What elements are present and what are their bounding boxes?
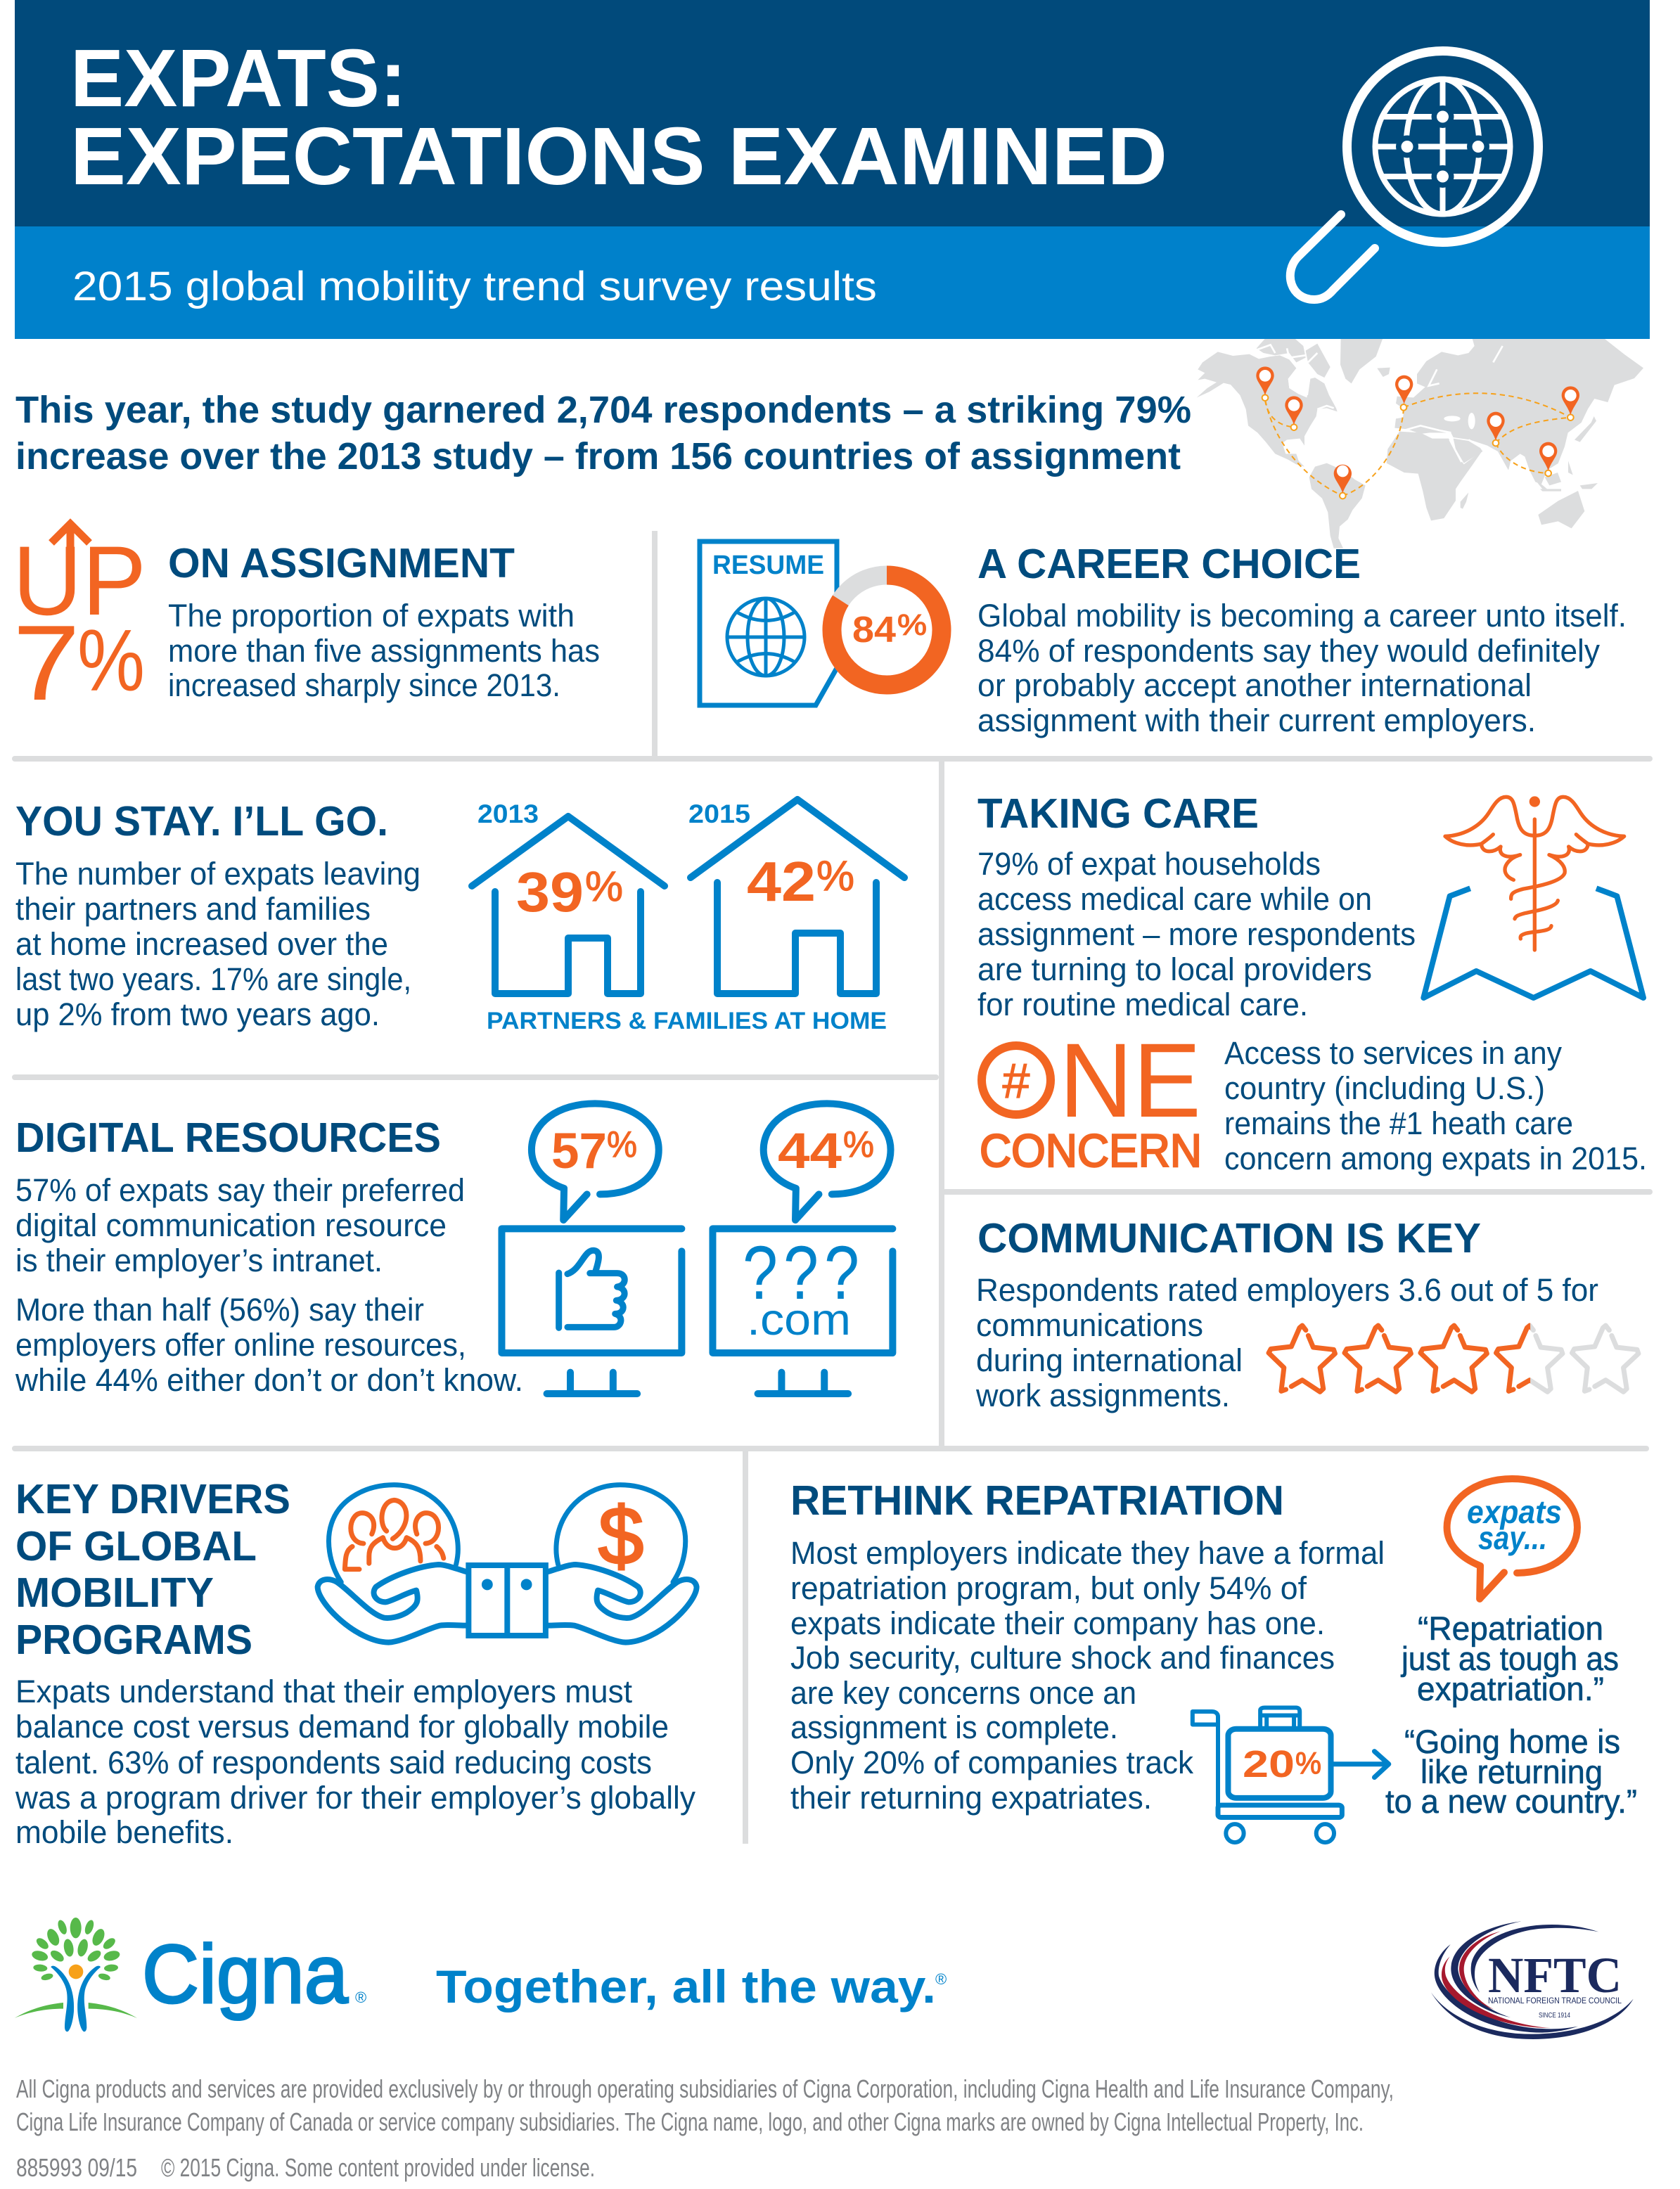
icon: monitor .com with 44% bubble bbox=[712, 1103, 892, 1394]
body text bbox=[168, 598, 600, 703]
icon: hands shaking holding people and money: $ bbox=[598, 1490, 643, 1581]
concern text: concern among expats in 2015. bbox=[1224, 1141, 1647, 1176]
icon: house 2013: % bbox=[585, 863, 623, 910]
body text: or probably accept another international bbox=[977, 667, 1532, 703]
quote 2: to a new country.” bbox=[1385, 1783, 1637, 1820]
icon: #ONE concern bbox=[980, 1021, 1202, 1176]
body text bbox=[975, 1272, 1598, 1413]
panel: communication is key bbox=[975, 1215, 1639, 1413]
tagline: ® bbox=[935, 1970, 947, 1988]
legal disclaimer: 885993 09/15 bbox=[16, 2153, 137, 2182]
world map with route pins bbox=[1197, 338, 1643, 548]
body text: communications bbox=[976, 1307, 1203, 1343]
body text: their returning expatriates. bbox=[790, 1780, 1152, 1816]
body text: was a program driver for their employer’s globally bbox=[15, 1780, 695, 1816]
icon: house 2013 bbox=[472, 800, 665, 994]
icon: luggage cart with 20%: % bbox=[1295, 1746, 1321, 1780]
icon: luggage cart with 20%: 20 bbox=[1243, 1743, 1295, 1785]
body text: while 44% either don’t or don’t know. bbox=[15, 1362, 523, 1398]
quote 1: expatriation.” bbox=[1417, 1670, 1604, 1707]
intro statement: increase over the 2013 study – from 156 countries of assignment bbox=[15, 435, 1181, 477]
body text: Global mobility is becoming a career unto itself. bbox=[977, 598, 1627, 634]
body text bbox=[15, 856, 421, 1032]
icon: luggage cart with 20% bbox=[1193, 1707, 1389, 1842]
body text: 79% of expat households bbox=[977, 846, 1321, 882]
quote 1: “Repatriation bbox=[1418, 1610, 1603, 1647]
heading: TAKING CARE bbox=[977, 790, 1259, 837]
heading: KEY DRIVERS bbox=[15, 1476, 290, 1522]
icon: monitor .com with 44% bubble: ? bbox=[743, 1230, 778, 1315]
icon: resume document: RESUME bbox=[712, 551, 824, 580]
logo: Cigna wordmark: ® bbox=[355, 1989, 366, 2006]
tagline: Together, all the way. bbox=[436, 1960, 936, 2013]
icon: #ONE concern: NE bbox=[1059, 1021, 1201, 1139]
intro statement bbox=[15, 389, 1191, 477]
body text: access medical care while on bbox=[977, 881, 1372, 917]
heading: MOBILITY bbox=[15, 1569, 214, 1616]
body text bbox=[977, 598, 1627, 738]
icon: house 2013: 39 bbox=[516, 861, 584, 923]
panel: key drivers bbox=[15, 1476, 697, 1850]
body text: increased sharply since 2013. bbox=[168, 667, 560, 703]
icon: monitor thumbs up with 57% bubble: % bbox=[607, 1124, 637, 1165]
body text: balance cost versus demand for globally mobile bbox=[15, 1709, 669, 1745]
heading: YOU STAY. I’LL GO. bbox=[15, 798, 388, 845]
body text: are key concerns once an bbox=[790, 1675, 1136, 1711]
body text: up 2% from two years ago. bbox=[15, 996, 380, 1032]
quote 1 bbox=[1400, 1610, 1619, 1707]
icon: house 2015: % bbox=[816, 852, 854, 899]
heading: COMMUNICATION IS KEY bbox=[977, 1215, 1481, 1262]
panel: you stay, I'll go bbox=[15, 798, 904, 1034]
icon: monitor thumbs up with 57% bubble: 57 bbox=[551, 1124, 607, 1179]
concern text bbox=[1224, 1035, 1647, 1176]
body text: assignment – more respondents bbox=[977, 916, 1416, 952]
header banner bbox=[15, 0, 1650, 339]
body text: mobile benefits. bbox=[15, 1814, 233, 1850]
logo: NFTC: NATIONAL FOREIGN TRADE COUNCIL bbox=[1488, 1996, 1622, 2005]
icon: house 2013: 2013 bbox=[477, 800, 539, 828]
panel: taking care bbox=[977, 790, 1647, 1176]
body text: assignment is complete. bbox=[790, 1709, 1118, 1745]
concern text: Access to services in any bbox=[1224, 1035, 1562, 1071]
icon: monitor .com with 44% bubble: ? bbox=[824, 1230, 859, 1315]
icon: monitor thumbs up with 57% bubble bbox=[501, 1103, 681, 1394]
body text: at home increased over the bbox=[15, 926, 388, 962]
logo: NFTC: NFTC bbox=[1488, 1947, 1622, 2003]
logo: NFTC: SINCE 1914 bbox=[1539, 2012, 1570, 2020]
body text: are turning to local providers bbox=[977, 951, 1372, 987]
body text bbox=[15, 1674, 695, 1850]
icon: up 7%: 7 bbox=[13, 603, 80, 723]
title: EXPECTATIONS EXAMINED bbox=[70, 110, 1167, 202]
icon: house 2015: 2015 bbox=[688, 800, 750, 828]
icon: up 7%: % bbox=[77, 612, 145, 710]
subtitle: 2015 global mobility trend survey results bbox=[72, 264, 877, 309]
heading: OF GLOBAL bbox=[15, 1523, 257, 1569]
body text: more than five assignments has bbox=[168, 633, 600, 669]
legal disclaimer bbox=[16, 2074, 1394, 2182]
body text: their partners and families bbox=[15, 891, 371, 927]
icon: monitor .com with 44% bubble: % bbox=[843, 1124, 874, 1165]
heading: A CAREER CHOICE bbox=[977, 541, 1361, 587]
body text: digital communication resource bbox=[15, 1207, 447, 1243]
quote 2: like returning bbox=[1421, 1753, 1603, 1790]
body text: repatriation program, but only 54% of bbox=[790, 1570, 1307, 1606]
chart: 84% donut: 84 bbox=[852, 610, 896, 650]
panel: rethink repatriation bbox=[790, 1477, 1637, 1842]
title bbox=[70, 32, 1167, 202]
icon: monitor .com with 44% bubble: .com bbox=[747, 1295, 851, 1344]
icon: magnifying glass with globe bbox=[1290, 51, 1539, 300]
icon: house 2015: 42 bbox=[747, 850, 816, 913]
body text bbox=[15, 1172, 523, 1398]
icon: expats say speech bubble: say... bbox=[1478, 1520, 1547, 1556]
body text: Only 20% of companies track bbox=[790, 1745, 1193, 1780]
body text: The number of expats leaving bbox=[15, 856, 421, 892]
legal disclaimer: © 2015 Cigna. Some content provided under license. bbox=[161, 2153, 595, 2182]
body text: last two years. 17% are single, bbox=[15, 961, 411, 997]
body text: Job security, culture shock and finances bbox=[790, 1640, 1335, 1676]
body text: Expats understand that their employers must bbox=[15, 1674, 632, 1709]
body text: Most employers indicate they have a formal bbox=[790, 1535, 1385, 1571]
icon: monitor .com with 44% bubble: ? bbox=[783, 1230, 819, 1315]
heading bbox=[15, 1476, 290, 1663]
panel: digital resources bbox=[15, 1103, 892, 1398]
heading: DIGITAL RESOURCES bbox=[15, 1115, 441, 1161]
body text: employers offer online resources, bbox=[15, 1327, 466, 1363]
body text: Respondents rated employers 3.6 out of 5 for bbox=[976, 1272, 1598, 1308]
icon: up 7%: UP bbox=[13, 525, 146, 636]
icon: expats say speech bubble bbox=[1447, 1479, 1577, 1599]
icon: #ONE concern: CONCERN bbox=[980, 1124, 1202, 1176]
body text: expats indicate their company has one. bbox=[790, 1605, 1325, 1641]
icon: expats say speech bubble: expats bbox=[1467, 1494, 1562, 1530]
logo: Cigna tree bbox=[15, 1918, 137, 2031]
body text: assignment with their current employers. bbox=[977, 702, 1536, 738]
chart: 84% donut bbox=[832, 575, 942, 685]
body text: 57% of expats say their preferred bbox=[15, 1172, 465, 1208]
body text: during international bbox=[976, 1342, 1243, 1378]
quote 1: just as tough as bbox=[1400, 1640, 1619, 1677]
title: EXPATS: bbox=[70, 32, 406, 124]
icon: #ONE concern: # bbox=[1003, 1053, 1030, 1108]
concern text: country (including U.S.) bbox=[1224, 1070, 1545, 1106]
body text: More than half (56%) say their bbox=[15, 1292, 424, 1328]
rating: 3.6 of 5 stars bbox=[1269, 1325, 1639, 1392]
icon: up 7% bbox=[13, 524, 146, 723]
quote 2: “Going home is bbox=[1404, 1723, 1620, 1760]
body text: talent. 63% of respondents said reducing costs bbox=[15, 1745, 652, 1780]
icon: hands shaking holding people and money bbox=[318, 1485, 697, 1643]
icon: caduceus over map bbox=[1423, 796, 1643, 998]
heading: RETHINK REPATRIATION bbox=[790, 1477, 1284, 1524]
panel: a career choice bbox=[700, 541, 1627, 738]
icon: resume document bbox=[700, 541, 837, 705]
body text: is their employer’s intranet. bbox=[15, 1243, 383, 1278]
body text bbox=[977, 846, 1416, 1022]
intro statement: This year, the study garnered 2,704 respondents – a striking 79% bbox=[15, 389, 1191, 431]
heading: ON ASSIGNMENT bbox=[168, 540, 515, 586]
body text: The proportion of expats with bbox=[168, 598, 575, 634]
body text: work assignments. bbox=[975, 1378, 1230, 1413]
heading: PROGRAMS bbox=[15, 1617, 252, 1663]
logo: Cigna wordmark: Cigna bbox=[142, 1928, 348, 2021]
body text: for routine medical care. bbox=[977, 987, 1308, 1022]
icon: monitor .com with 44% bubble: 44 bbox=[778, 1124, 842, 1179]
chart caption: PARTNERS & FAMILIES AT HOME bbox=[487, 1008, 887, 1034]
body text: 84% of respondents say they would definitely bbox=[977, 633, 1600, 669]
icon: house 2015 bbox=[688, 800, 904, 994]
concern text: remains the #1 heath care bbox=[1224, 1105, 1573, 1141]
body text bbox=[790, 1535, 1385, 1816]
panel: on assignment bbox=[13, 524, 600, 723]
logo: NFTC bbox=[1431, 1921, 1634, 2039]
quote 2 bbox=[1385, 1723, 1637, 1820]
chart: 84% donut: % bbox=[897, 608, 927, 641]
